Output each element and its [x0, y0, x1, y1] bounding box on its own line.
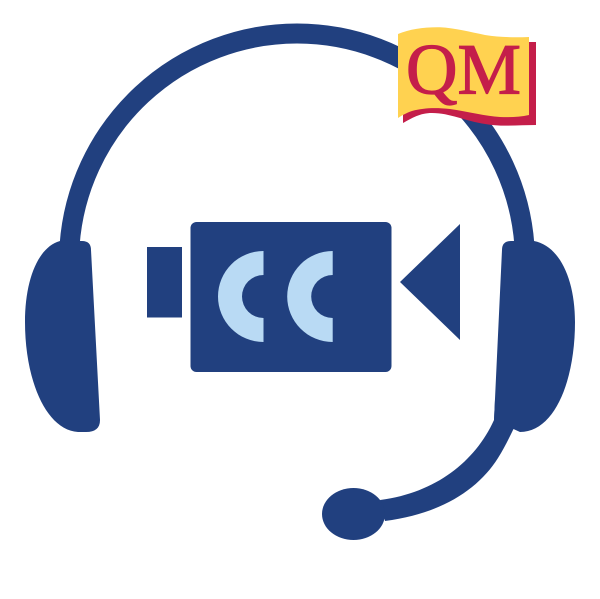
camera viewfinder	[147, 247, 182, 318]
first caption arc	[218, 251, 264, 342]
icon: headset	[25, 34, 575, 540]
logo: QM flag	[398, 27, 536, 126]
flag shadow	[403, 42, 536, 126]
closed caption symbol	[218, 251, 333, 342]
flag	[398, 27, 529, 118]
second caption arc	[287, 251, 333, 342]
camera body	[190, 222, 392, 372]
microphone	[322, 488, 385, 540]
microphone boom	[380, 400, 514, 521]
flag text: QM	[406, 30, 521, 110]
left ear cup	[25, 241, 100, 432]
camera lens triangle	[400, 224, 460, 340]
headband	[70, 34, 524, 245]
right ear cup	[494, 241, 575, 432]
icon: video camera	[147, 222, 460, 372]
